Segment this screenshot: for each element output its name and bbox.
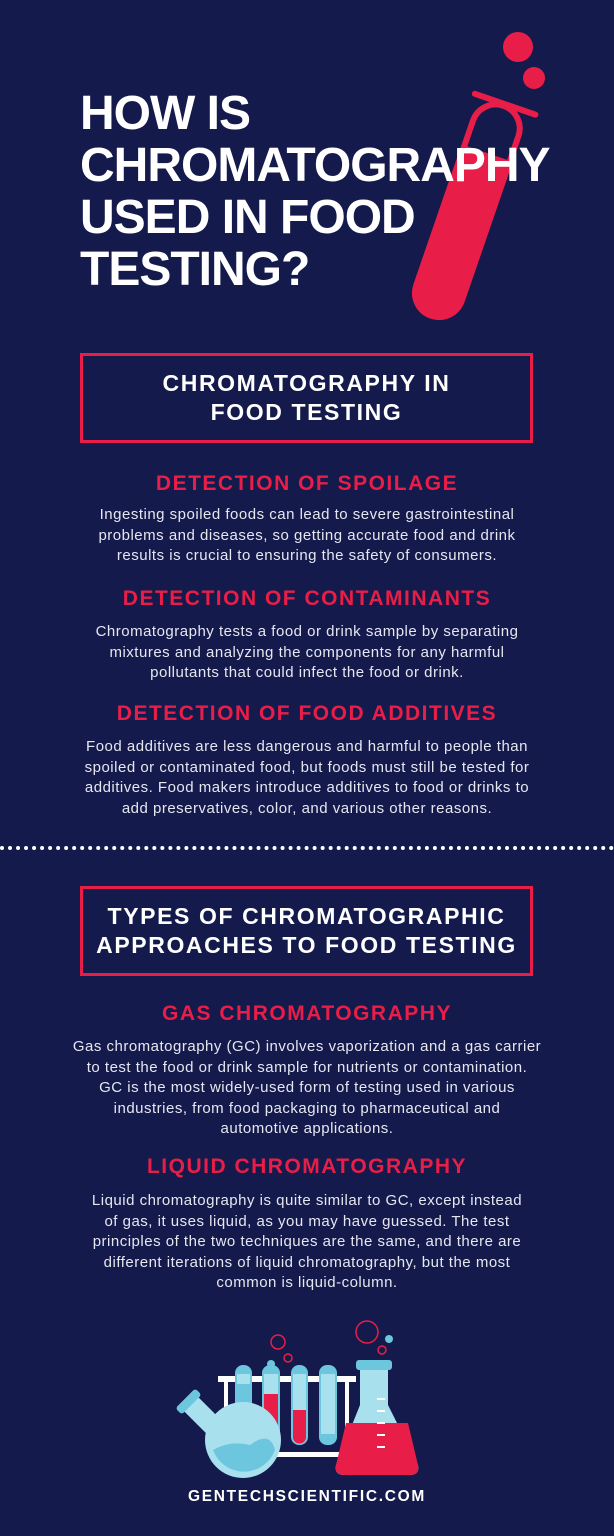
- heading: contaminants: DETECTION OF CONTAMINANTS: [123, 587, 491, 610]
- title: USED IN FOOD: [80, 191, 415, 244]
- text: liquid: Liquid chromatography is quite similar to GC, except instead: [92, 1192, 522, 1209]
- text: gas: GC is the most widely-used form of testing used in various: [99, 1079, 515, 1096]
- text: gas: automotive applications.: [221, 1120, 393, 1137]
- heading: spoilage: DETECTION OF SPOILAGE: [156, 472, 458, 495]
- panel: types heading box: TYPES OF CHROMATOGRAPHIC: [108, 903, 505, 929]
- text: liquid: of gas, it uses liquid, as you may have guessed. The test: [104, 1212, 510, 1230]
- text: liquid: principles of the two techniques are the same, and there are: [93, 1233, 521, 1250]
- text: spoilage: Ingesting spoiled foods can lead to severe gastrointestinal: [100, 506, 514, 523]
- text: contaminants: pollutants that could infect the food or drink.: [150, 664, 464, 681]
- text: additives: [85, 738, 529, 816]
- text: liquid: different iterations of liquid chromatography, but the most: [104, 1254, 510, 1270]
- text: liquid: common is liquid-column.: [216, 1274, 398, 1291]
- icon: lab glassware: [176, 1320, 418, 1478]
- title: HOW IS: [80, 87, 250, 140]
- panel: chromatography in food testing heading box: CHROMATOGRAPHY IN: [163, 370, 450, 396]
- text: additives: spoiled or contaminated food, but foods must still be tested for: [85, 758, 529, 776]
- text: additives: Food additives are less dangerous and harmful to people than: [86, 738, 528, 755]
- panel: types heading box: APPROACHES TO FOOD TESTING: [96, 932, 517, 958]
- text: spoilage: problems and diseases, so getting accurate food and drink: [98, 526, 516, 544]
- text: contaminants: Chromatography tests a food or drink sample by separating: [96, 623, 518, 640]
- panel: types heading box: [80, 886, 533, 976]
- text: additives: add preservatives, color, and various other reasons.: [122, 800, 492, 816]
- text: gas: to test the food or drink sample for nutrients or contamination.: [87, 1058, 527, 1076]
- text: contaminants: [96, 623, 518, 681]
- text: liquid: [92, 1192, 522, 1291]
- heading: gas: GAS CHROMATOGRAPHY: [162, 1002, 452, 1025]
- icon: test tube: [412, 32, 545, 320]
- text: spoilage: [98, 506, 516, 564]
- title: [80, 87, 550, 296]
- footer url: GENTECHSCIENTIFIC.COM: [188, 1488, 426, 1505]
- text: spoilage: results is crucial to ensuring the safety of consumers.: [117, 547, 497, 564]
- text: gas: Gas chromatography (GC) involves vaporization and a gas carrier: [73, 1038, 541, 1055]
- text: gas: [73, 1038, 541, 1137]
- panel: chromatography in food testing heading box: FOOD TESTING: [211, 399, 402, 425]
- heading: liquid: LIQUID CHROMATOGRAPHY: [147, 1155, 467, 1178]
- text: additives: additives. Food makers introduce additives to food or drinks to: [85, 779, 529, 796]
- text: contaminants: mixtures and analyzing the components for any harmful: [109, 644, 505, 660]
- title: CHROMATOGRAPHY: [80, 139, 550, 192]
- text: gas: industries, from food packaging to pharmaceutical and: [114, 1100, 500, 1116]
- heading: additives: DETECTION OF FOOD ADDITIVES: [117, 702, 497, 725]
- panel: chromatography in food testing heading box: [80, 353, 533, 443]
- title: TESTING?: [80, 243, 309, 296]
